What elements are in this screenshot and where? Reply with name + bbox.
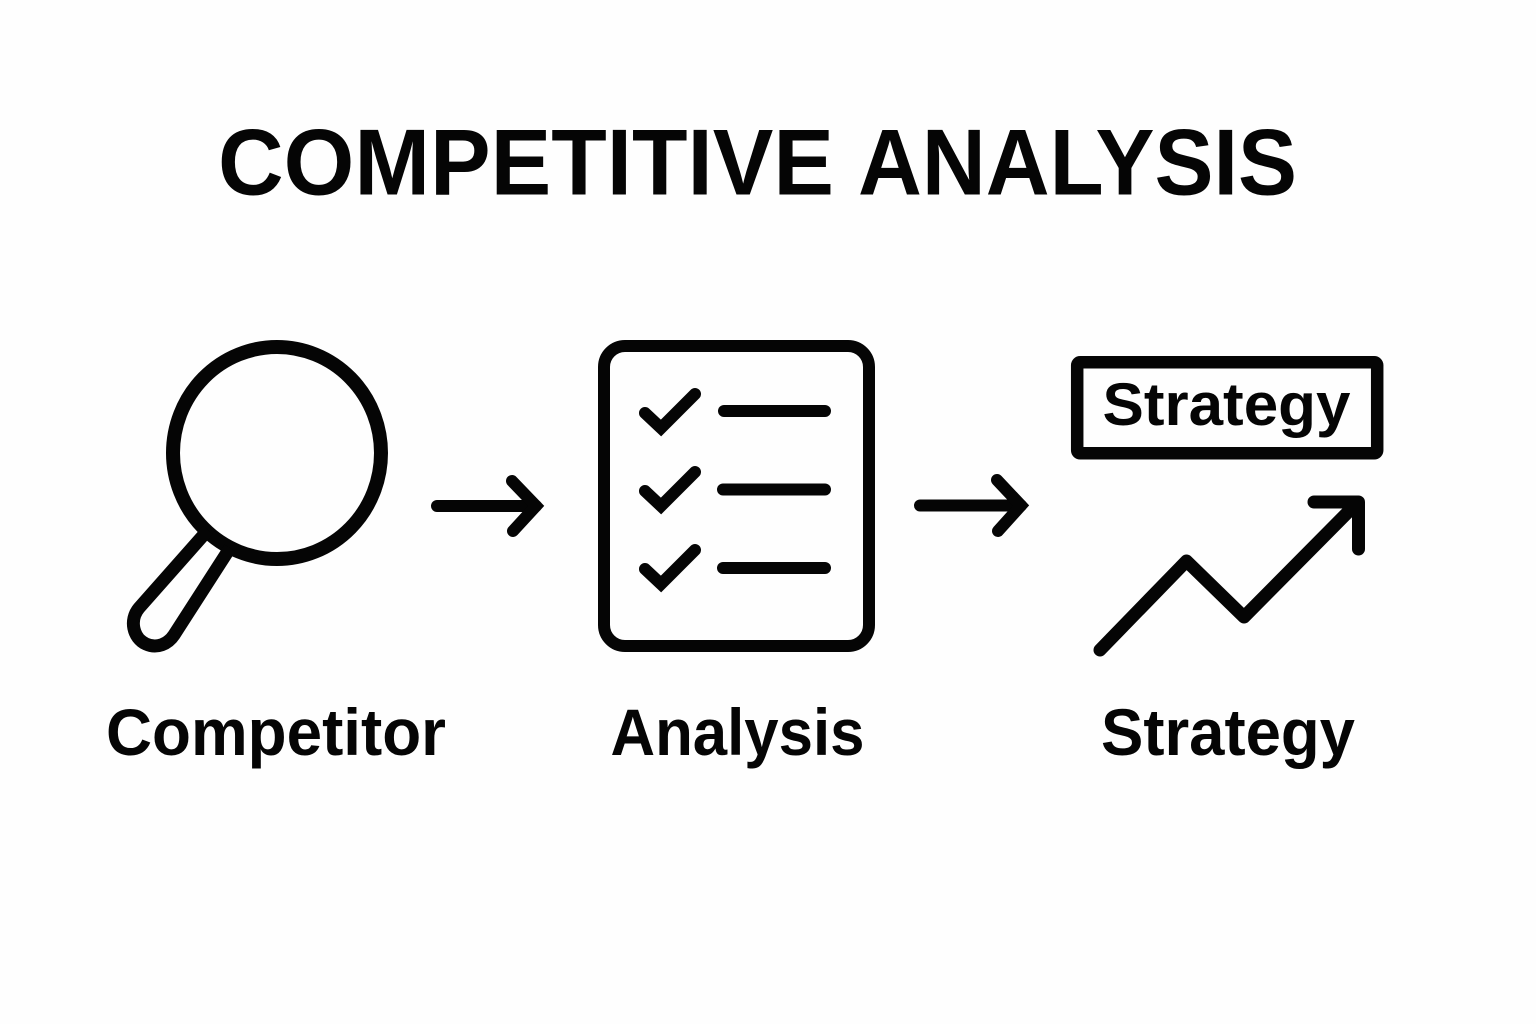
check row 2 — [645, 472, 825, 506]
title — [218, 110, 1297, 214]
label: analysis: Analysis — [610, 695, 864, 769]
label: strategy: Strategy — [1101, 695, 1355, 769]
title: COMPETITIVE — [218, 110, 834, 214]
icon: magnifying glass — [133, 347, 381, 646]
arrow: competitor to analysis — [437, 481, 536, 531]
arrow: analysis to strategy — [920, 480, 1021, 531]
label: competitor: Competitor — [106, 695, 446, 769]
strategy sign box — [1077, 362, 1377, 453]
check row 1 — [645, 394, 825, 428]
check row 3 — [645, 550, 825, 584]
icon: checklist — [604, 346, 869, 646]
title: ANALYSIS — [858, 110, 1297, 214]
strategy sign box: Strategy — [1102, 371, 1351, 438]
icon: rising trend arrow — [1100, 502, 1358, 650]
